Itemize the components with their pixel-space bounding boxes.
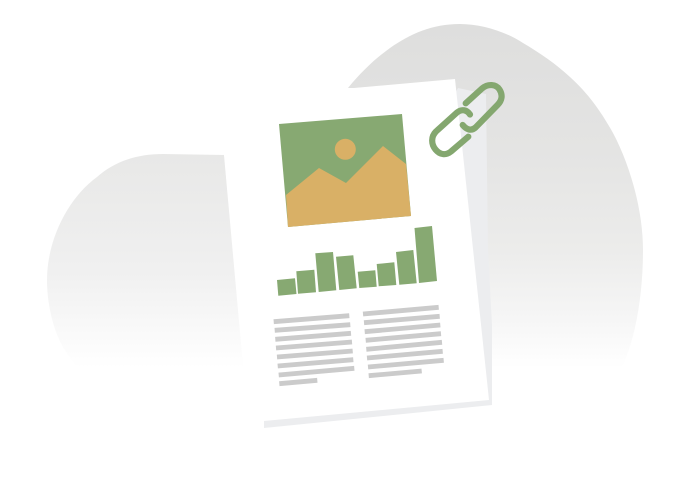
image sky — [279, 114, 411, 227]
text lines: left column — [274, 316, 354, 384]
left lobe — [47, 154, 260, 367]
lower link — [432, 110, 470, 154]
background cloud shape — [47, 24, 643, 367]
image sun — [335, 139, 356, 160]
image mountains — [286, 146, 411, 227]
right lobe — [348, 24, 643, 367]
document back sheet — [264, 88, 492, 428]
document front page — [219, 79, 489, 421]
text lines: right column — [363, 307, 444, 376]
bar chart — [277, 226, 437, 296]
image placeholder — [279, 114, 411, 227]
icon: chain link — [432, 85, 502, 154]
upper link — [463, 85, 502, 130]
